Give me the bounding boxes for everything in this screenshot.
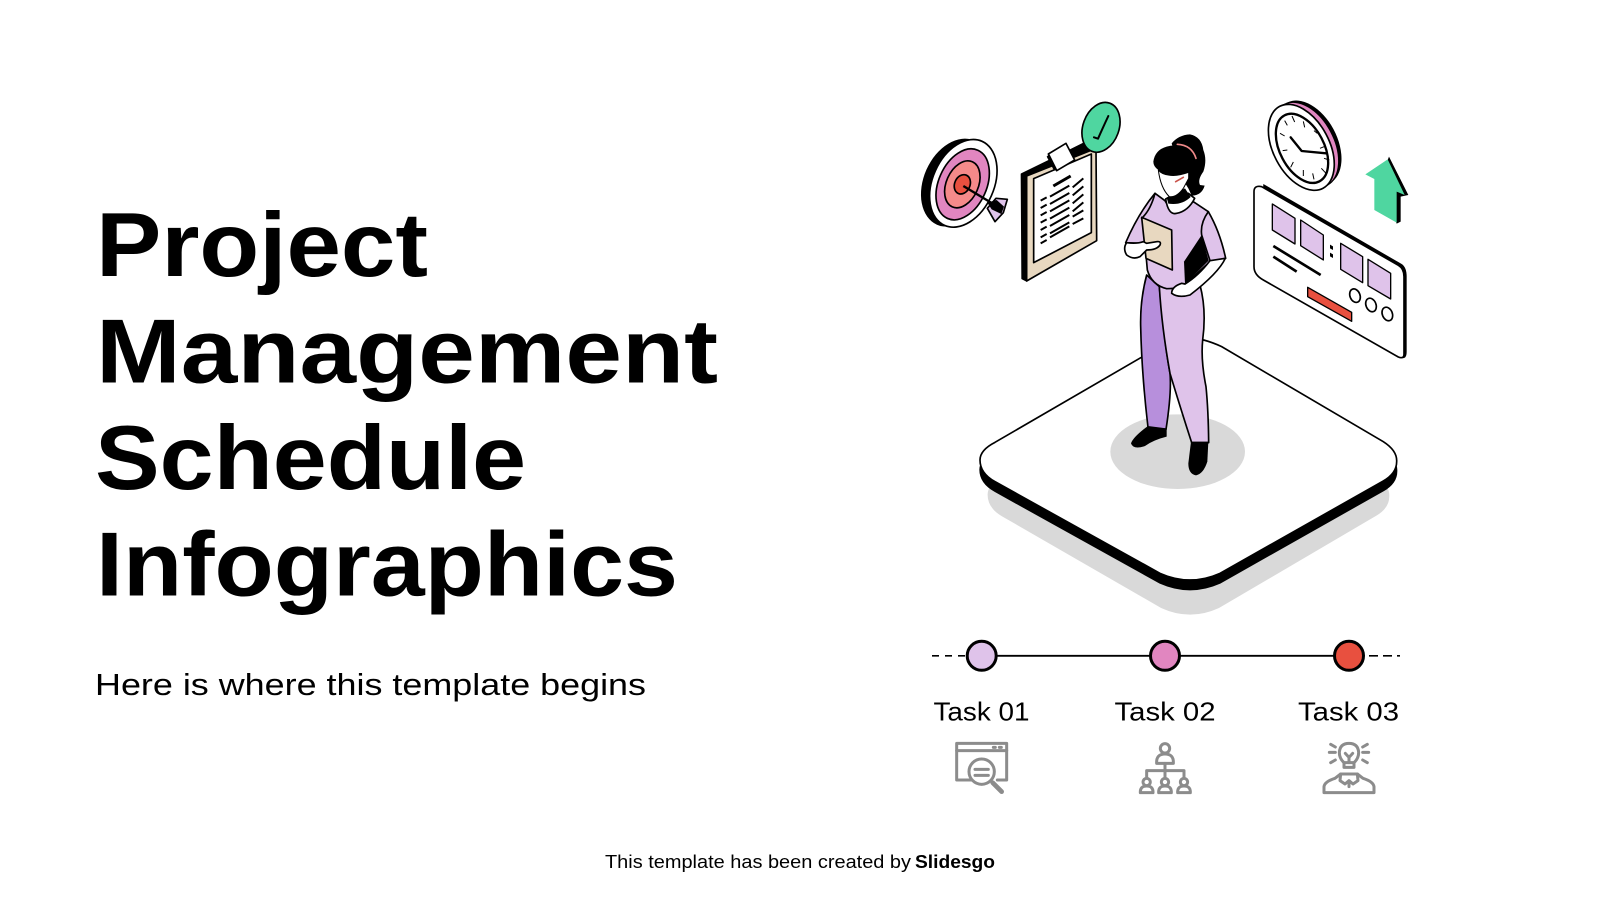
front leg	[1159, 285, 1209, 443]
title: Project	[96, 195, 428, 296]
clock back	[1262, 89, 1355, 197]
ear	[1176, 177, 1183, 182]
front shoe	[1188, 442, 1208, 475]
task 01 label: Task 01	[934, 696, 1030, 726]
clock face	[1255, 93, 1348, 201]
title: Infographics	[96, 514, 678, 616]
hair front	[1153, 146, 1194, 179]
title: Schedule	[95, 408, 526, 509]
title	[95, 195, 718, 616]
up arrow	[1365, 157, 1408, 224]
panel back	[1260, 184, 1407, 358]
shirt	[1126, 193, 1226, 289]
paper	[1034, 154, 1091, 263]
clipboard	[1021, 143, 1097, 281]
clock ticks	[1280, 116, 1329, 179]
head	[1153, 134, 1205, 214]
badge	[1075, 97, 1127, 158]
neck	[1166, 193, 1195, 214]
dart tail	[987, 200, 1004, 214]
arrow body	[1365, 159, 1405, 223]
person	[1110, 134, 1245, 489]
subtitle: Here is where this template begins	[95, 667, 646, 702]
clip	[1048, 143, 1075, 171]
neck shadow	[1167, 188, 1191, 204]
torso	[1125, 193, 1226, 296]
bullseye	[951, 172, 973, 197]
dashboard panel	[1254, 184, 1407, 358]
back leg	[1141, 275, 1170, 429]
target face	[917, 129, 1010, 238]
clock rim	[1260, 91, 1352, 198]
target back	[908, 128, 1004, 238]
right arm	[1172, 258, 1225, 296]
purple cards	[1272, 204, 1391, 299]
node 2	[1150, 641, 1180, 670]
pink ring	[926, 140, 1000, 228]
dart shaft	[963, 186, 997, 206]
dashed right	[1369, 655, 1400, 657]
node 3	[1334, 641, 1364, 670]
red button	[1308, 287, 1352, 321]
node 1	[967, 641, 996, 670]
panel front	[1254, 186, 1404, 358]
dart fletching	[987, 198, 1007, 222]
round buttons	[1348, 287, 1395, 322]
floor shadow	[1110, 414, 1245, 489]
footer credit: This template has been created by	[605, 852, 911, 872]
green check badge	[1075, 97, 1127, 158]
hair back	[1172, 134, 1205, 196]
salmon ring	[938, 155, 987, 213]
arrow shadow	[1380, 157, 1408, 224]
heading line	[1053, 176, 1071, 186]
colon dots	[1330, 245, 1333, 258]
task 02 label: Task 02	[1114, 696, 1216, 726]
solid line	[981, 655, 1349, 657]
back shoe	[1131, 426, 1167, 447]
platform	[980, 338, 1397, 615]
board	[1027, 148, 1097, 281]
dashed left	[932, 655, 966, 657]
clock hands	[1291, 137, 1326, 153]
text lines	[1041, 178, 1083, 243]
board edge	[1021, 143, 1095, 281]
platform top	[980, 338, 1397, 580]
tablet	[1142, 217, 1172, 270]
face	[1158, 170, 1189, 197]
platform shadow	[988, 373, 1389, 615]
left hand	[1125, 242, 1160, 258]
book	[1184, 235, 1209, 284]
target	[908, 128, 1010, 238]
clock	[1255, 89, 1355, 201]
check mark	[1094, 116, 1108, 139]
clip side	[1047, 154, 1057, 171]
timeline	[932, 641, 1400, 670]
platform side	[980, 348, 1397, 590]
footer credit: Slidesgo	[915, 852, 995, 872]
icon: org chart	[1140, 744, 1190, 793]
title: Management	[96, 302, 718, 402]
task 03 label: Task 03	[1298, 696, 1399, 726]
shoulder seams	[1142, 193, 1210, 261]
icon: search window	[957, 743, 1007, 792]
icon: idea person	[1324, 743, 1374, 793]
clock dial	[1265, 105, 1339, 192]
text lines	[1273, 246, 1321, 275]
headband	[1177, 144, 1196, 158]
